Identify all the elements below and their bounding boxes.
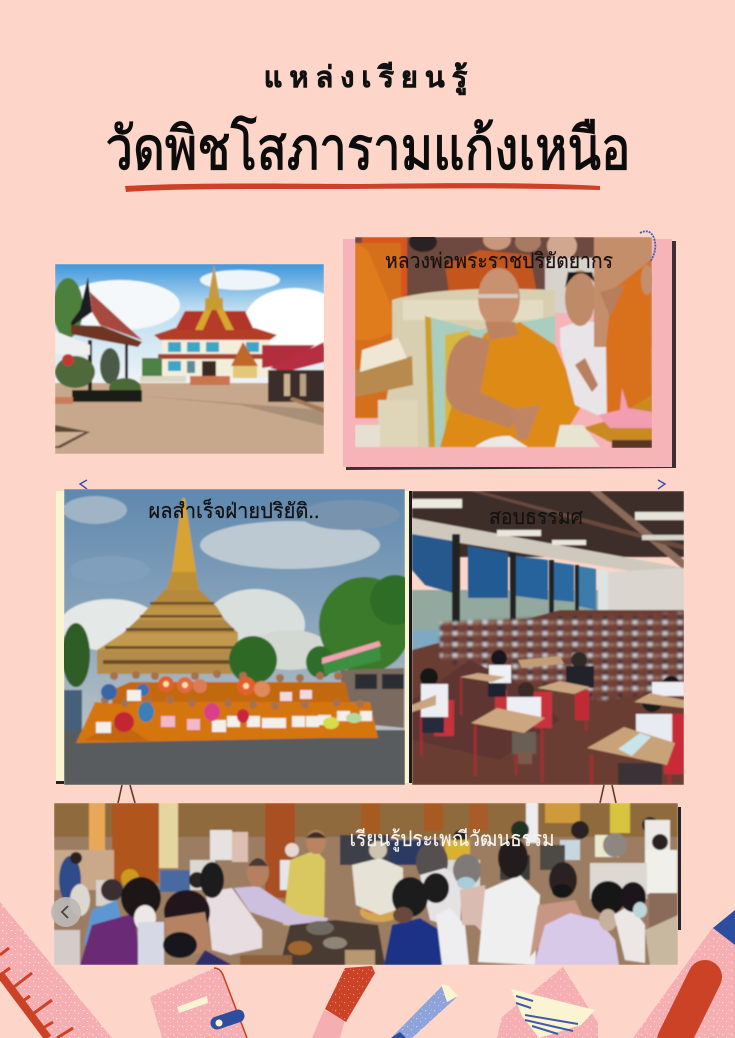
blue shirt xyxy=(84,900,122,945)
panel: culture crowd photo xyxy=(54,803,681,965)
certificates xyxy=(96,690,372,733)
label: dharma exam: สอบธรรมศ xyxy=(489,506,584,529)
sky xyxy=(64,489,405,734)
pagoda xyxy=(97,498,238,674)
icon: blue pen xyxy=(391,984,458,1038)
chairs xyxy=(434,700,454,736)
white shirt man centre xyxy=(478,875,540,965)
right monk xyxy=(594,237,652,347)
kids xyxy=(420,668,438,686)
pillow xyxy=(425,316,556,447)
pink frame xyxy=(343,239,672,467)
truck xyxy=(340,668,404,728)
lilac robe xyxy=(534,913,619,965)
title underline xyxy=(125,183,600,192)
black mask man xyxy=(164,890,210,934)
wall xyxy=(607,567,684,612)
ceiling xyxy=(412,491,684,557)
desks xyxy=(587,727,675,765)
window backdrop xyxy=(412,590,612,630)
floral woman xyxy=(206,888,262,955)
box xyxy=(355,356,413,397)
white shirt woman xyxy=(436,908,469,965)
white woman right xyxy=(614,905,645,963)
icon: red pen xyxy=(312,966,375,1038)
subtitle: แหล่งเรียนรู้ xyxy=(264,62,474,95)
temple xyxy=(162,337,270,377)
hanging strings right xyxy=(600,785,616,803)
distant crowd xyxy=(59,856,81,904)
arrow: carousel left xyxy=(80,480,87,489)
fans xyxy=(158,676,174,692)
floral shirt man xyxy=(352,858,403,915)
blue shirt man xyxy=(384,918,447,965)
table with bowls xyxy=(280,920,385,965)
lilac sleeve man xyxy=(234,886,328,926)
frame shadow xyxy=(346,241,676,470)
monk xyxy=(440,322,582,447)
road xyxy=(64,730,405,785)
banner xyxy=(322,647,381,675)
right buildings xyxy=(262,345,315,368)
front rows of students xyxy=(420,650,684,785)
icon: envelope xyxy=(497,967,598,1038)
title: วัดพิชโสภารามแก้งเหนือ xyxy=(106,115,630,182)
gray pale left xyxy=(54,930,80,965)
purple shirt man xyxy=(80,913,140,965)
standing woman right xyxy=(645,850,677,894)
masked woman xyxy=(530,900,582,957)
label: abbot: หลวงพ่อพระราชปริยัตยากร xyxy=(385,250,613,273)
yellow shirt man xyxy=(283,850,325,930)
icon: ruler left xyxy=(0,902,112,1038)
plants xyxy=(55,356,95,388)
left tree xyxy=(53,278,83,338)
icon: notebook xyxy=(150,968,247,1038)
pavilion xyxy=(71,277,92,327)
pink face woman xyxy=(460,885,490,940)
floor xyxy=(412,610,684,785)
offering xyxy=(583,395,652,442)
man in white xyxy=(560,320,608,420)
label: culture: เรียนรู้ประเพณีวัฒนธรรม xyxy=(350,828,554,852)
sky xyxy=(55,264,324,389)
distant students xyxy=(440,612,684,700)
label: achievement: ผลสำเร็จฝ่ายปริยัติ.. xyxy=(148,497,320,523)
panel: abbot photo with pink frame xyxy=(343,230,676,470)
hall backdrop xyxy=(54,803,678,965)
crowd behind xyxy=(355,237,595,292)
tent xyxy=(55,331,90,355)
hanging strings left xyxy=(118,785,135,803)
panel: exam hall photo xyxy=(409,491,684,785)
icon: hanging loop xyxy=(640,231,655,262)
arrow: carousel right xyxy=(658,480,665,489)
curtains xyxy=(412,534,453,593)
panel: temple photo xyxy=(53,264,345,454)
button: carousel previous xyxy=(51,897,81,927)
gray hair man xyxy=(416,842,448,882)
trees xyxy=(229,636,277,684)
cream frame xyxy=(56,491,410,783)
icon: ruler right xyxy=(633,910,735,1038)
ground xyxy=(55,383,324,454)
monks back row xyxy=(111,680,350,706)
flower chair xyxy=(372,289,555,447)
panel: pagoda photo xyxy=(56,489,420,785)
monks front row xyxy=(76,702,378,743)
